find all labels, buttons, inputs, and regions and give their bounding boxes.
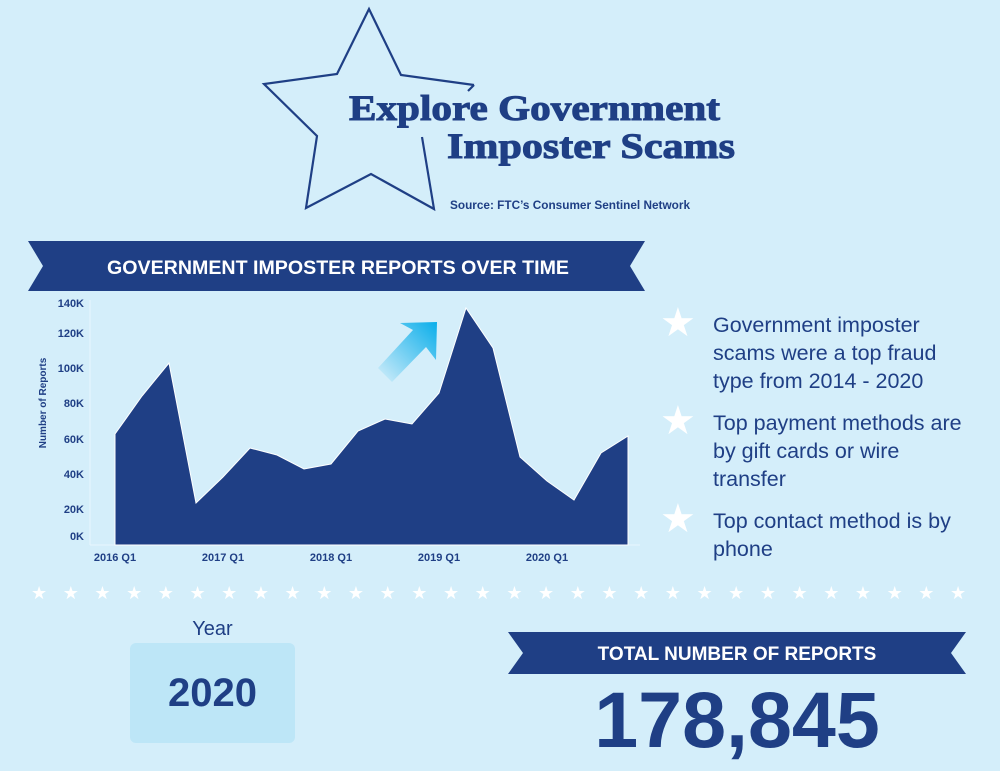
star divider row: ★ — [126, 583, 142, 603]
star divider row: ★ — [253, 583, 269, 603]
icon: arrow up — [378, 322, 437, 382]
year box: 2020 — [168, 671, 257, 715]
star divider row: ★ — [633, 583, 649, 603]
star divider row: ★ — [158, 583, 174, 603]
area chart: Number of Reports — [38, 357, 49, 448]
star divider row: ★ — [887, 583, 903, 603]
area chart: 2018 Q1 — [310, 552, 352, 564]
star divider row — [31, 583, 966, 603]
bullet 1: ★ — [660, 301, 696, 345]
star divider row: ★ — [63, 583, 79, 603]
star divider row: ★ — [443, 583, 459, 603]
star divider row: ★ — [760, 583, 776, 603]
star divider row: ★ — [538, 583, 554, 603]
bullet list — [660, 301, 962, 561]
area chart: 2016 Q1 — [94, 552, 136, 564]
star divider row: ★ — [94, 583, 111, 603]
banner: reports over time — [28, 241, 645, 291]
bullet 3: Top contact method is by phone — [713, 509, 951, 561]
star divider row: ★ — [31, 583, 47, 603]
banner: reports over time: GOVERNMENT IMPOSTER REPORTS OVER TIME — [107, 258, 569, 279]
bullet 2: ★ — [660, 399, 696, 443]
star divider row: ★ — [792, 583, 808, 603]
star divider row: ★ — [189, 583, 206, 603]
star divider row: ★ — [570, 583, 586, 603]
banner: total reports: TOTAL NUMBER OF REPORTS — [598, 644, 876, 665]
title: Imposter Scams — [447, 126, 735, 166]
bullet 3 — [660, 497, 951, 561]
title: Explore Government — [349, 88, 720, 128]
star divider row: ★ — [950, 583, 966, 603]
bullet 1: Government imposter scams were a top fraud type from 2014 - 2020 — [713, 313, 936, 393]
area chart: 2017 Q1 — [202, 552, 244, 564]
year label: Year — [192, 618, 233, 640]
star divider row: ★ — [601, 583, 618, 603]
banner: total reports — [508, 632, 966, 674]
star divider row: ★ — [348, 583, 364, 603]
area chart: 120K — [58, 328, 84, 340]
icon: star outline — [264, 9, 474, 209]
star divider row: ★ — [823, 583, 839, 603]
total number: 178,845 — [594, 675, 880, 764]
area chart: 100K — [58, 363, 84, 375]
star divider row: ★ — [380, 583, 396, 603]
area chart: 80K — [64, 398, 84, 410]
source: Source: FTC’s Consumer Sentinel Network — [450, 198, 690, 212]
area chart: 0K — [70, 531, 84, 543]
area chart: 40K — [64, 469, 84, 481]
star divider row: ★ — [665, 583, 681, 603]
area chart: 2019 Q1 — [418, 552, 460, 564]
star divider row: ★ — [696, 583, 713, 603]
star divider row: ★ — [316, 583, 332, 603]
star divider row: ★ — [728, 583, 744, 603]
area chart: 20K — [64, 504, 84, 516]
star divider row: ★ — [221, 583, 237, 603]
star divider row: ★ — [284, 583, 301, 603]
bullet 3: ★ — [660, 497, 696, 541]
star divider row: ★ — [855, 583, 871, 603]
title — [349, 88, 735, 166]
area chart: 2020 Q1 — [526, 552, 568, 564]
area chart — [38, 298, 640, 564]
star divider row: ★ — [411, 583, 427, 603]
year box — [130, 643, 295, 743]
area chart: 140K — [58, 298, 84, 310]
area chart: 60K — [64, 434, 84, 446]
star divider row: ★ — [475, 583, 491, 603]
bullet 2: Top payment methods are by gift cards or wire transfer — [713, 411, 962, 491]
star divider row: ★ — [506, 583, 522, 603]
star divider row: ★ — [918, 583, 934, 603]
